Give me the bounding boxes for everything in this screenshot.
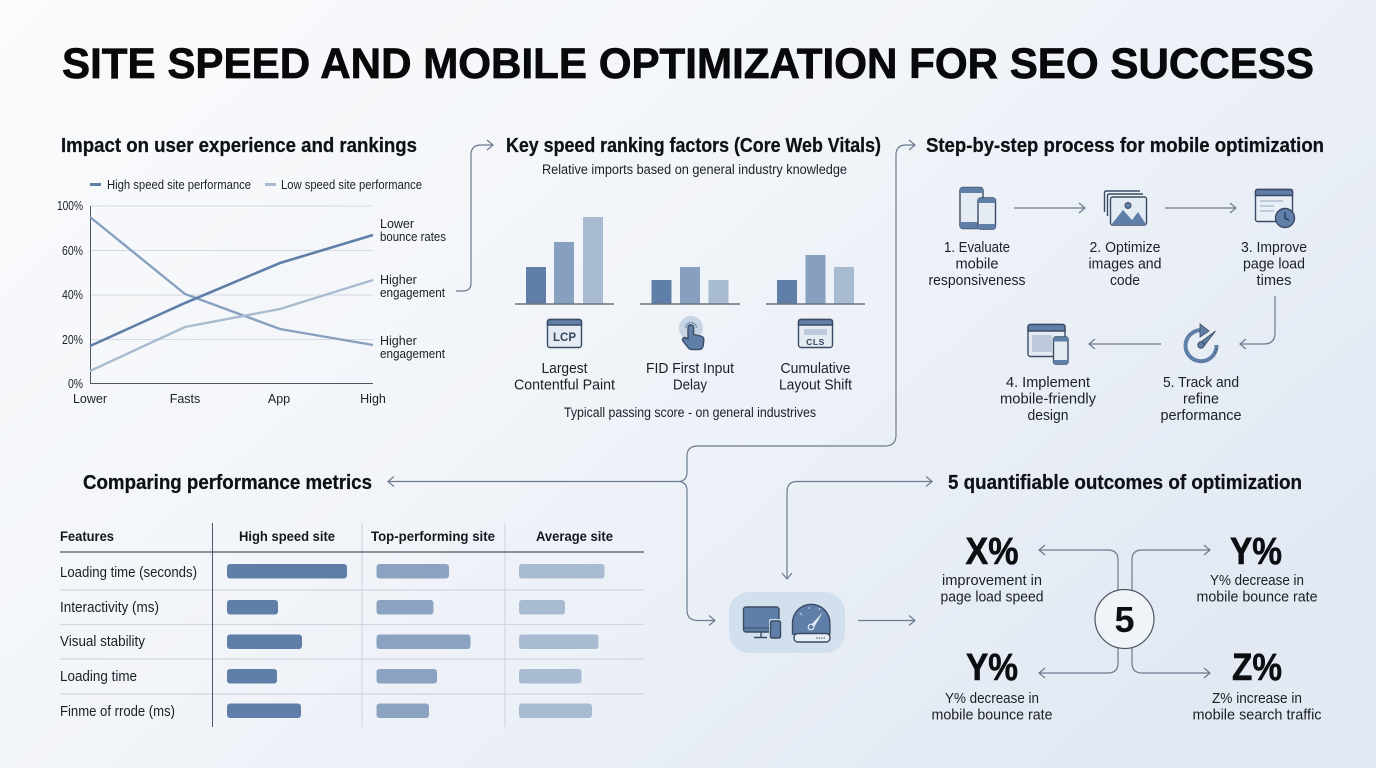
outcome: Y% bottom: Y% decrease in [945,691,1039,707]
label: cumulative layout shift: Cumulative [780,361,850,377]
outcome: Z%: mobile search traffic [1192,708,1322,724]
label: largest contentful paint: Largest [542,361,588,377]
bar chart: FID [640,267,740,304]
arrow: chart to speed factors [456,140,493,291]
label: first input delay: Delay [673,378,708,394]
heading: key speed factors: Key speed ranking factors (Core Web Vitals) [506,135,881,157]
icon: image stack [1104,191,1146,225]
line chart [57,199,446,406]
arrow: step 1 to 2 [1014,203,1085,213]
icon: window and phone [1028,324,1068,364]
bar chart: CLS [766,255,865,304]
label: step 3: times [1256,273,1292,289]
arrow: to outcomes and down to badge [782,476,932,579]
line chart: 40% [62,288,83,302]
icon: tap gesture [679,316,704,350]
outcome: Y% top: Y% [1230,531,1282,573]
label: step 2: code [1110,273,1140,289]
outcome: X% [940,531,1044,606]
icon: CLS window [798,320,832,348]
outcome: X%: X% [966,531,1018,573]
line chart: Higher [380,273,417,287]
title: SITE SPEED AND MOBILE OPTIMIZATION FOR SEO SUCCESS [62,40,1314,88]
connectors from center circle [1039,545,1210,678]
heading: process: Step-by-step process for mobile optimization [926,135,1324,157]
icon: window and clock [1256,190,1294,228]
icon: gauge refresh [1186,324,1217,361]
icon: LCP window: LCP [553,332,576,344]
label: step 5: 5. Track and [1163,375,1239,391]
label: largest contentful paint: Contentful Paint [514,378,615,394]
outcome: Y% bottom: Y% [966,647,1018,689]
table: Visual stability [60,634,146,650]
outcome: Z%: Z% increase in [1212,691,1302,707]
line chart: Fasts [170,392,200,406]
table: Features [60,528,114,544]
outcome: Y% top: Y% decrease in [1210,573,1304,589]
label: cumulative layout shift: Layout Shift [779,378,852,394]
line chart: Lower [380,217,414,231]
arrow: badge to outcomes [858,616,915,626]
line chart: 20% [62,333,83,347]
outcome: Y% top: mobile bounce rate [1196,590,1318,606]
table: Interactivity (ms) [60,600,159,616]
label: step 1: 1. Evaluate [944,240,1010,256]
icon: device and speed gauge badge [729,592,845,653]
chart legend: High speed site performance [107,178,251,192]
line chart: Lower [73,392,107,406]
label: step 4: design [1028,408,1068,424]
label: step 4: mobile-friendly [1000,392,1097,408]
label: step 2: images and [1088,256,1162,272]
label: step 5: performance [1160,408,1242,424]
outcome: Z% [1192,647,1322,724]
panel: comparing performance metrics [60,472,644,727]
panel: impact on user experience and rankings [57,135,446,406]
label: step 1: mobile [956,256,998,272]
heading: impact: Impact on user experience and rankings [61,135,417,157]
line chart: 100% [57,199,83,213]
table [60,523,644,727]
arrow: step 2 to 3 [1165,203,1236,213]
line chart: 0% [68,377,83,391]
table: Average site [536,528,613,544]
table: Loading time (seconds) [60,565,197,581]
icon: LCP window [548,320,582,348]
icon: CLS window: CLS [806,337,825,347]
heading: outcomes: 5 quantifiable outcomes of optimization [948,472,1302,494]
heading: comparing: Comparing performance metrics [83,472,372,494]
table: Finme of rrode (ms) [60,704,175,720]
icon: tablet and phone [960,188,996,229]
panel: key speed ranking factors [506,135,881,420]
outcome: X%: improvement in [942,573,1042,589]
line chart: engagement [380,286,445,300]
label: step 2: 2. Optimize [1090,240,1160,256]
line chart: engagement [380,347,445,361]
label: step 3: 3. Improve [1241,240,1307,256]
label: step 1: responsiveness [928,273,1026,289]
table: High speed site [239,528,335,544]
table: Loading time [60,669,137,685]
subtitle: Relative imports based on general industry knowledge [542,162,847,177]
caption: Typicall passing score - on general industrives [564,405,816,420]
line chart: App [268,392,290,406]
table: Top-performing site [371,528,495,544]
label: step 3: page load [1243,256,1305,272]
label: step 5: refine [1183,392,1219,408]
chart legend: Low speed site performance [281,178,422,192]
arrow: step 5 to 4 [1089,339,1161,349]
line chart: bounce rates [380,230,446,244]
line chart: High [360,392,386,406]
panel: step-by-step process [926,135,1324,424]
outcome: Y% top [1196,531,1318,606]
outcome: Y% bottom [932,647,1052,724]
outcome: Z%: Z% [1232,647,1282,689]
label: first input delay: FID First Input [646,361,734,377]
panel: quantifiable outcomes [932,472,1322,724]
line chart: Higher [380,334,417,348]
arrow: step 3 to 5 [1240,296,1275,349]
bar chart: LCP [515,217,614,304]
center circle: 5 [1114,599,1135,640]
outcome: X%: page load speed [940,590,1044,606]
line chart: 60% [62,244,83,258]
chart legend [90,178,422,192]
outcome: Y% bottom: mobile bounce rate [932,708,1052,724]
arrow: branching connector from process to table and device [388,140,915,626]
label: step 4: 4. Implement [1006,375,1090,391]
center circle [1095,590,1154,648]
